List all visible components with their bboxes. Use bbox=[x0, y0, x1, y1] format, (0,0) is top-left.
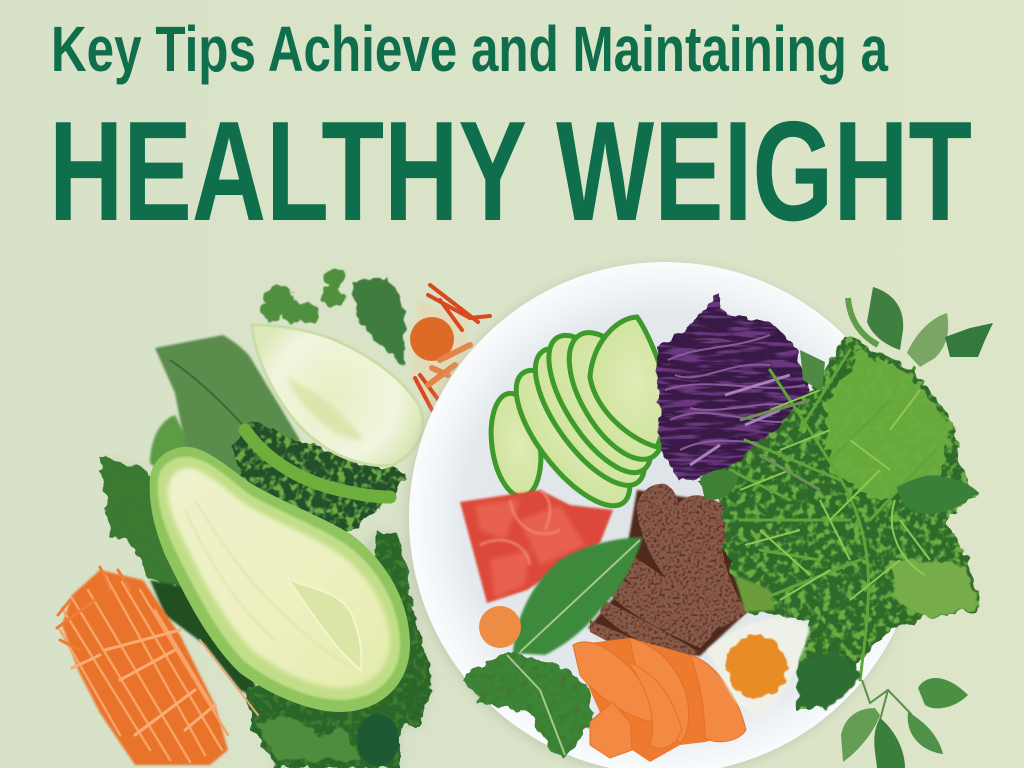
carrot slices bbox=[573, 638, 746, 762]
title: second line: HEALTHY bbox=[49, 92, 527, 251]
cucumber slices bbox=[485, 317, 682, 523]
sliced meat bbox=[588, 484, 748, 657]
loose herb sprig bottom right bbox=[841, 678, 968, 768]
herb salad bbox=[700, 287, 993, 710]
red cabbage bbox=[657, 293, 815, 482]
illustration: left vegetables bbox=[57, 268, 490, 768]
watermelon pieces bbox=[460, 490, 613, 603]
dark basil leaf bbox=[463, 537, 643, 760]
avocado half bbox=[150, 447, 410, 712]
pale squash half bbox=[252, 325, 423, 466]
fried egg bbox=[707, 617, 810, 720]
plate of food bbox=[407, 262, 993, 768]
shredded carrot pile bbox=[57, 567, 258, 765]
carrot rounds bbox=[479, 606, 521, 648]
red chili and sliced garnish bbox=[410, 285, 490, 412]
plate bbox=[407, 262, 921, 768]
herb sprigs at top bbox=[262, 268, 405, 366]
leaves behind avocado bbox=[100, 335, 433, 768]
green bean bbox=[245, 430, 390, 497]
